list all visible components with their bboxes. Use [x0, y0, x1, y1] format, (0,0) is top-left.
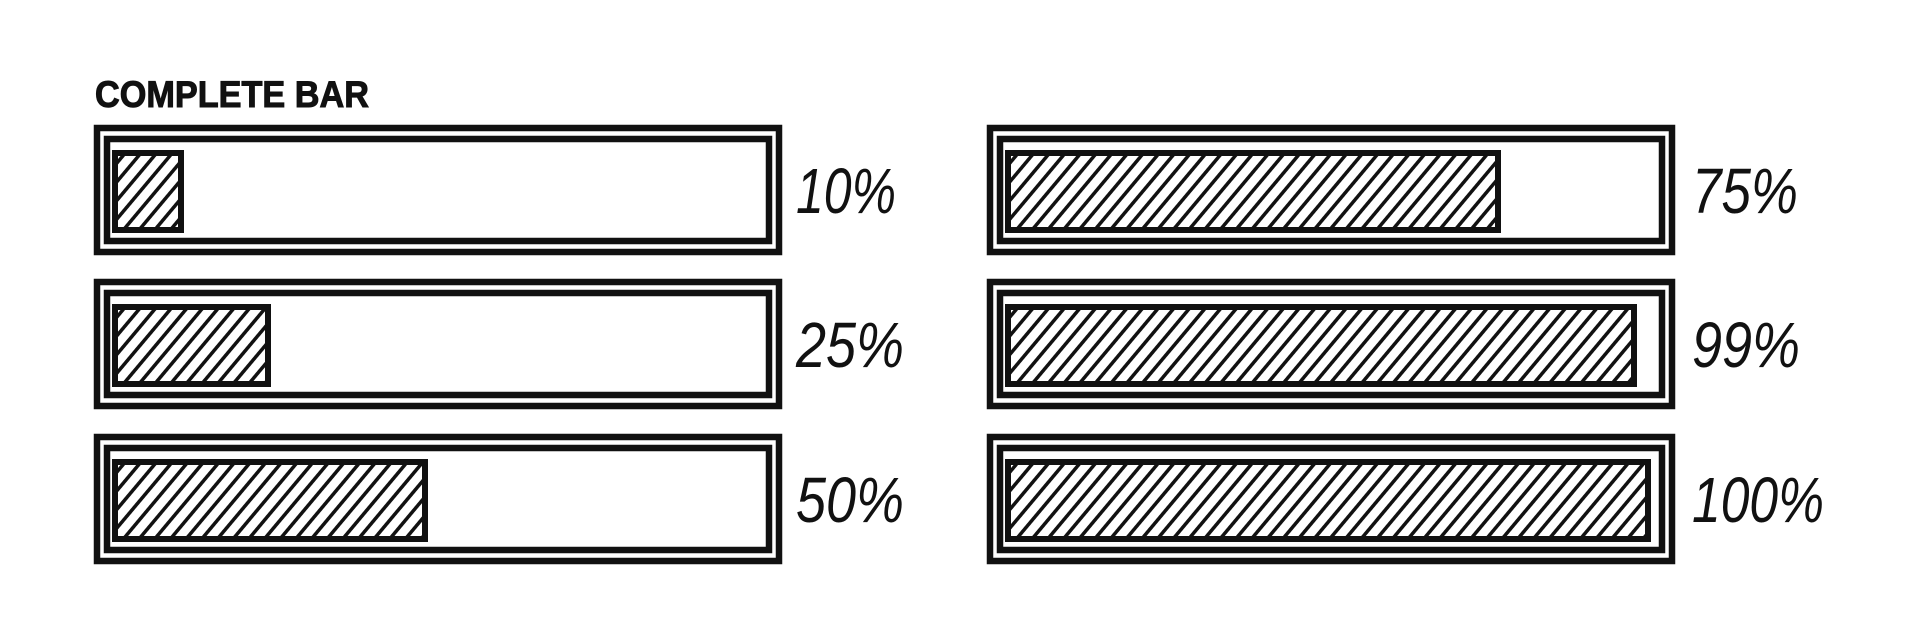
label: 25%: 25%: [795, 309, 904, 381]
bar: 75%: [990, 128, 1672, 252]
label: 50%: 50%: [796, 464, 904, 536]
bar: 99%: [990, 282, 1672, 406]
bar: 50%: [97, 437, 779, 561]
label: 99%: 99%: [1692, 309, 1800, 381]
bar: 10%: [97, 128, 779, 252]
label: 10%: 10%: [796, 155, 896, 227]
bar: 25%: [97, 282, 779, 406]
label: 75%: 75%: [1692, 155, 1798, 227]
label: 100%: 100%: [1692, 464, 1824, 536]
bar: 100%: [990, 437, 1672, 561]
title: COMPLETE BAR: [95, 74, 369, 115]
